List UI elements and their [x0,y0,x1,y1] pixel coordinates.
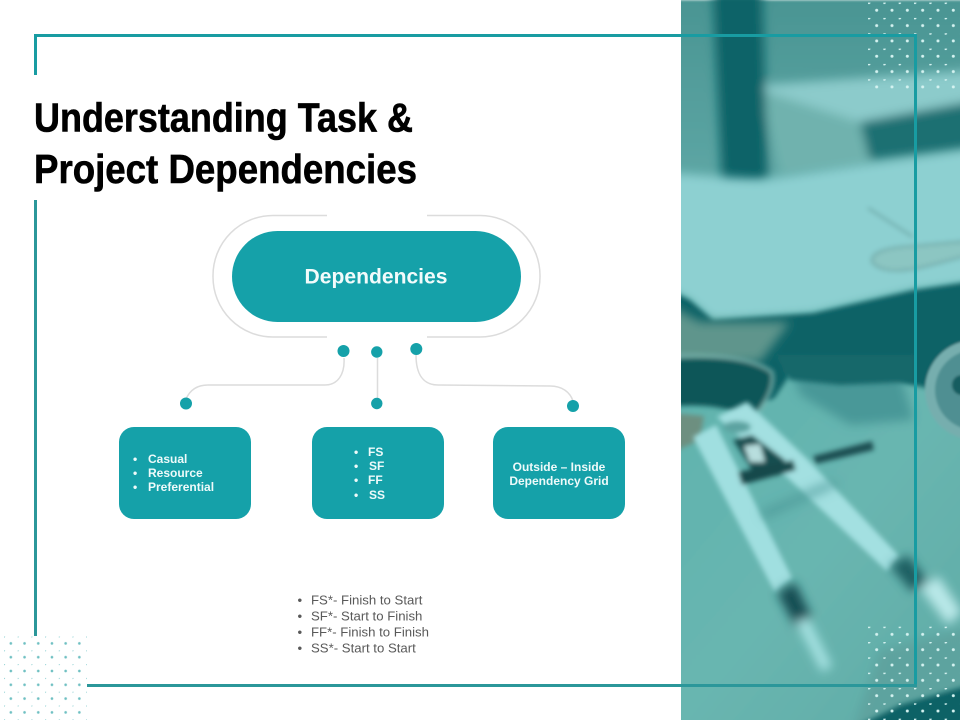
frame: left upper stub [34,34,37,75]
legend: abbreviation key: FF*- Finish to Finish [311,624,429,640]
frame: right line [914,34,917,687]
legend: abbreviation key: • [298,624,302,640]
connector: right branch [410,343,579,412]
title: Project Dependencies [34,146,417,192]
frame: top line [34,34,917,37]
connector: middle branch [371,346,382,409]
title: Understanding Task & [34,94,413,140]
frame: left lower line [34,200,37,636]
box: dependency types: Resource [148,466,203,480]
legend: abbreviation key: • [298,640,302,656]
box: outside-inside grid: Dependency Grid [509,474,609,488]
box: dependency types: Preferential [148,480,214,494]
box: relationship types: • [354,488,358,502]
frame: bottom line [87,684,917,687]
outer pill outline [213,216,540,337]
box: relationship types: SS [369,488,385,502]
box: relationship types: SF [369,459,384,473]
box: relationship types: FS [368,445,383,459]
box: dependency types: • [133,480,137,494]
heading pill: Dependencies [232,231,521,322]
legend: abbreviation key [298,592,429,656]
dot pattern: top right [868,2,955,89]
heading pill: Dependencies: Dependencies [304,266,448,288]
box: dependency types: • [133,466,137,480]
legend: abbreviation key: SS*- Start to Start [311,640,416,656]
dot pattern: bottom left [0,636,87,720]
title [34,94,417,192]
disc at right edge [925,340,960,440]
box: outside-inside grid [493,427,625,519]
box: dependency types: • [133,452,137,466]
box: relationship types [312,427,444,519]
legend: abbreviation key: SF*- Start to Finish [311,608,422,624]
box: relationship types: • [354,473,358,487]
box: outside-inside grid: Outside – Inside [513,460,606,474]
connector: left branch [180,345,350,410]
background photo of drafting compass [660,0,960,720]
legend: abbreviation key: FS*- Finish to Start [311,592,423,608]
legend: abbreviation key: • [298,592,302,608]
box: dependency types: Casual [148,452,187,466]
dot pattern: bottom right [868,626,960,720]
box: dependency types [119,427,251,519]
box: relationship types: FF [368,473,383,487]
legend: abbreviation key: • [298,608,302,624]
box: relationship types: • [354,445,358,459]
box: relationship types: • [354,459,358,473]
